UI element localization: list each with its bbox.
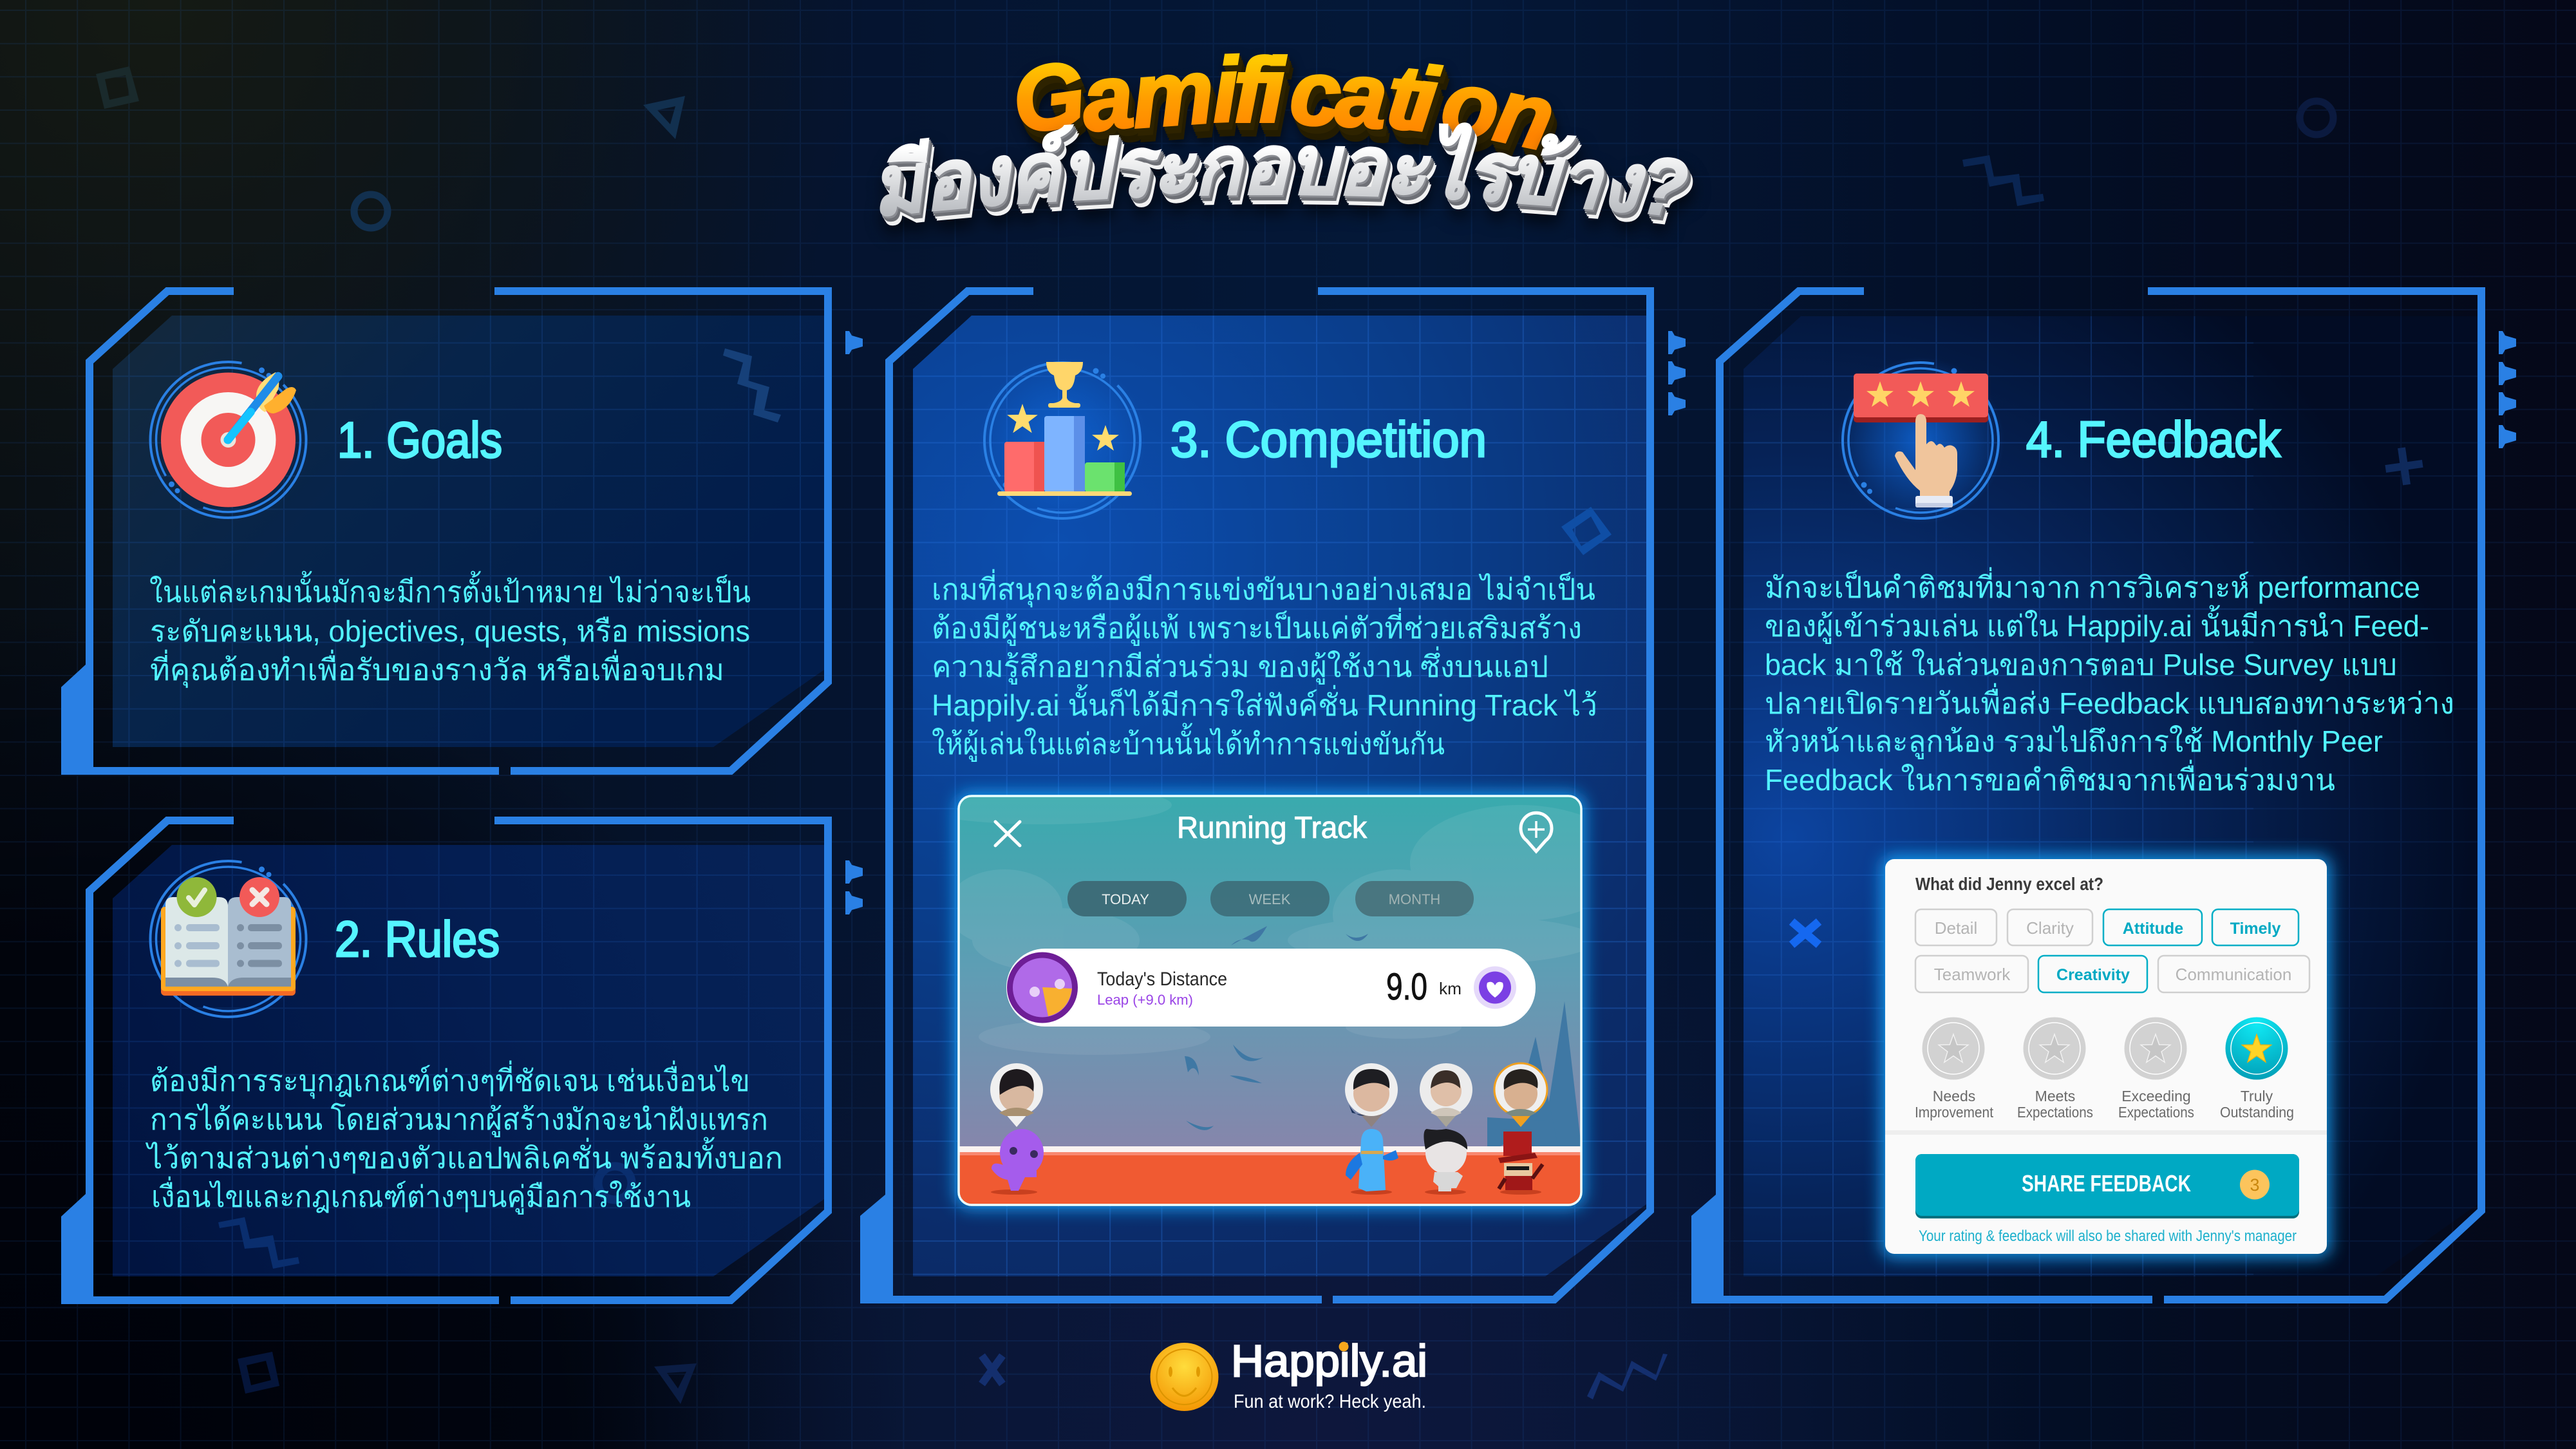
running track card glow [955, 792, 1585, 1209]
panel 2: Rules [61, 820, 863, 1304]
rating labels: Meets [2035, 1088, 2075, 1104]
rating labels: Needs [1933, 1088, 1975, 1104]
panel 4 frame [1691, 291, 2481, 1303]
heading: 1. Goals: 1. Goals [337, 412, 502, 468]
panel 4 tab markers [2499, 331, 2516, 448]
icon: target with arrow [118, 330, 339, 550]
panel 1 tab marker [845, 331, 863, 354]
rating labels: Expectations [2118, 1104, 2194, 1121]
close icon [995, 822, 1020, 846]
today's distance bar: Leap (+9.0 km) [1097, 992, 1193, 1008]
today's distance bar: 9.0 [1386, 966, 1427, 1008]
share feedback button: 3 [2250, 1175, 2260, 1195]
heading: 3. Competition: 3. Competition [1170, 411, 1487, 468]
text block: rules description [145, 1060, 783, 1215]
text block: feedback description: ของผู้เข้าร่วมเล่น แต่ใน Happily.ai นั้นมีการนำ Feed- [1765, 605, 2429, 644]
text block: competition description: ความรู้สึกอยากมีส่วนร่วม ของผู้ใช้งาน ซึ่งบนแอป [932, 646, 1548, 685]
text block: goals description: ที่คุณต้องทำเพื่อรับของรางวัล หรือเพื่อจบเกม [150, 649, 724, 688]
attribute chips [1915, 909, 2309, 992]
text block: feedback description: ปลายเปิดรายวันเพื่อส่ง Feedback แบบสองทางระหว่าง [1765, 683, 2454, 720]
text block: feedback description [1765, 567, 2454, 797]
tagline: Fun at work? Heck yeah. [1234, 1391, 1426, 1412]
text block: competition description: Happily.ai นั้นก็ได้มีการใส่ฟังค์ชั่น Running Track ไว้ [932, 684, 1597, 722]
attribute chips: Teamwork [1934, 965, 2011, 984]
logo coin [1150, 1343, 1218, 1411]
text block: rules description: เงื่อนไขและกฎเกณฑ์ต่างๆบนคู่มือการใช้งาน [151, 1176, 691, 1215]
icon: rule book [118, 829, 339, 1049]
text block: rules description: การได้คะแนน โดยส่วนมากผู้สร้างมักจะนำฝังแทรก [150, 1103, 768, 1137]
share feedback button: SHARE FEEDBACK [2022, 1170, 2191, 1197]
feedback app screenshot [1885, 859, 2327, 1254]
attribute chips: Creativity [2056, 966, 2130, 984]
text block: goals description [149, 571, 751, 688]
runner pins [990, 1063, 1547, 1127]
panel 1: Goals [61, 291, 863, 775]
heading: 2. Rules: 2. Rules [335, 911, 500, 967]
panel 3 tab markers [1668, 331, 1686, 415]
attribute chips: Communication [2176, 965, 2291, 984]
Happily.ai logo [1150, 1336, 1427, 1412]
attribute chips: Detail [1935, 918, 1977, 938]
heading: Running Track: Running Track [1177, 810, 1367, 844]
panel 4: Feedback [1691, 291, 2516, 1303]
icon: hand pressing star rating [1810, 330, 2031, 551]
rating labels: Truly [2241, 1088, 2273, 1104]
feedback card glow [1881, 855, 2331, 1258]
panel 2 tab markers [845, 860, 863, 914]
rating labels: Outstanding [2220, 1104, 2294, 1121]
today's distance bar: km [1439, 979, 1462, 998]
panel 3 frame [860, 291, 1650, 1303]
footnote: Your rating & feedback will also be shared with Jenny's manager [1919, 1227, 2297, 1245]
filter pills [1067, 881, 1474, 916]
panel 2 frame [61, 820, 828, 1304]
title line: Gamification: Gamification [1006, 39, 1563, 170]
rating labels [1915, 1088, 2294, 1121]
title line: Thai subtitle: มีองค์ประกอบอะไรบ้าง? [877, 122, 1697, 237]
today's distance bar [1006, 949, 1536, 1027]
filter pills: WEEK [1249, 891, 1291, 907]
text block: rules description: ไว้ตามส่วนต่างๆของตัวแอปพลิเคชั่น พร้อมทั้งบอก [145, 1137, 783, 1175]
text block: feedback description: มักจะเป็นคำติชมที่มาจาก การวิเคราะห์ performance [1765, 567, 2420, 604]
rating labels: Exceeding [2121, 1088, 2191, 1104]
text block: feedback description: Feedback ในการขอคำติชมจากเพื่อนร่วมงาน [1765, 759, 2335, 797]
text block: competition description: ต้องมีผู้ชนะหรือผู้แพ้ เพราะเป็นแค่ตัวที่ช่วยเสริมสร้าง [932, 607, 1582, 646]
rating labels: Improvement [1915, 1104, 1994, 1121]
panel backgrounds [113, 316, 2477, 1276]
icon: podium with trophy [952, 330, 1172, 551]
attribute chips: Clarity [2026, 918, 2074, 938]
filter pills: MONTH [1389, 891, 1440, 907]
question: What did Jenny excel at? [1915, 874, 2103, 894]
panel 1 frame [61, 291, 828, 775]
heading: 4. Feedback: 4. Feedback [2026, 411, 2281, 468]
text block: feedback description: back มาใช้ ในส่วนของการตอบ Pulse Survey แบบ [1765, 648, 2397, 681]
text block: goals description: ในแต่ละเกมนั้นมักจะมีการตั้งเป้าหมาย ไม่ว่าจะเป็น [149, 571, 751, 609]
text block: competition description: เกมที่สนุกจะต้องมีการแข่งขันบางอย่างเสมอ ไม่จำเป็น [932, 569, 1595, 608]
add location pin icon [1521, 813, 1552, 851]
share feedback button [1915, 1154, 2299, 1218]
running track app screenshot [957, 795, 1583, 1206]
filter pills: TODAY [1102, 891, 1149, 907]
text block: rules description: ต้องมีการระบุกฎเกณฑ์ต่างๆที่ชัดเจน เช่นเงื่อนไข [150, 1060, 750, 1099]
logo wordmark: Happily.ai [1231, 1336, 1427, 1386]
attribute chips: Timely [2230, 920, 2280, 938]
rating medals [1923, 1018, 2288, 1079]
text block: competition description: ให้ผู้เล่นในแต่ละบ้านนั้นได้ทำการแข่งขันกัน [932, 723, 1445, 762]
text block: competition description [932, 569, 1597, 762]
text block: goals description: ระดับคะแนน, objectives, quests, หรือ missions [150, 614, 750, 648]
attribute chips: Attitude [2123, 920, 2183, 938]
text block: feedback description: หัวหน้าและลูกน้อง รวมไปถึงการใช้ Monthly Peer [1765, 724, 2383, 759]
rating labels: Expectations [2017, 1104, 2093, 1121]
today's distance bar: Today's Distance [1097, 969, 1227, 990]
title [877, 39, 1697, 237]
runner characters [992, 1129, 1543, 1191]
panel 3: Competition [860, 291, 1686, 1303]
